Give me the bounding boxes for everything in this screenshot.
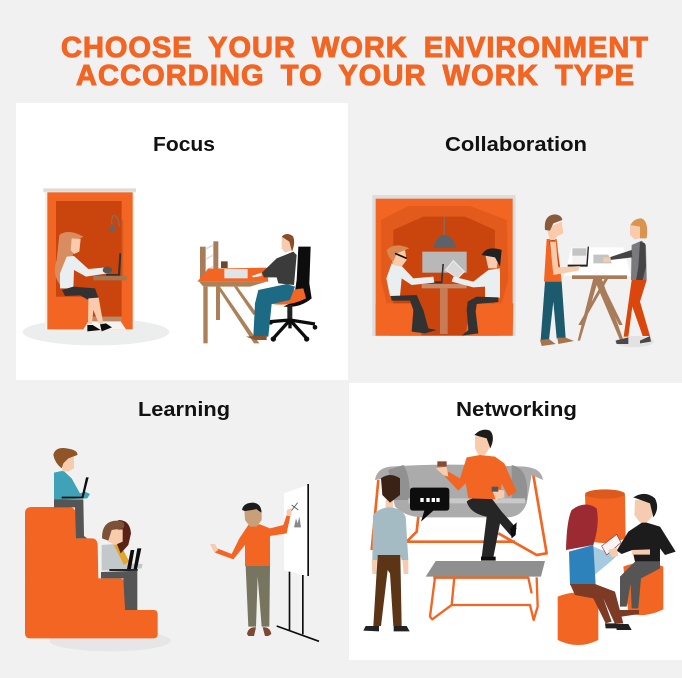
panel: collaboration bbox=[372, 134, 654, 347]
heading: focus: Focus bbox=[153, 134, 215, 156]
illustration: lounge sofa group bbox=[363, 430, 547, 631]
heading: networking: Networking bbox=[456, 399, 577, 421]
illustration: people on stepped seating bbox=[25, 448, 171, 651]
heading: collaboration: Collaboration bbox=[445, 134, 587, 156]
illustration: meeting booth bbox=[372, 195, 516, 336]
illustration: standing people at table bbox=[540, 214, 654, 347]
heading: learning: Learning bbox=[138, 399, 230, 421]
illustration: people on orange stools bbox=[558, 489, 676, 645]
panel: learning bbox=[25, 399, 319, 651]
illustration: woman in booth bbox=[23, 188, 169, 345]
illustration: presenter at whiteboard bbox=[210, 484, 319, 641]
panel: networking bbox=[349, 383, 682, 660]
title: ACCORDING TO YOUR WORK TYPE bbox=[76, 60, 634, 92]
title: CHOOSE YOUR WORK ENVIRONMENT bbox=[61, 32, 648, 64]
illustration: man at desk bbox=[197, 234, 317, 343]
panel: focus bbox=[16, 103, 348, 380]
title bbox=[61, 32, 648, 92]
